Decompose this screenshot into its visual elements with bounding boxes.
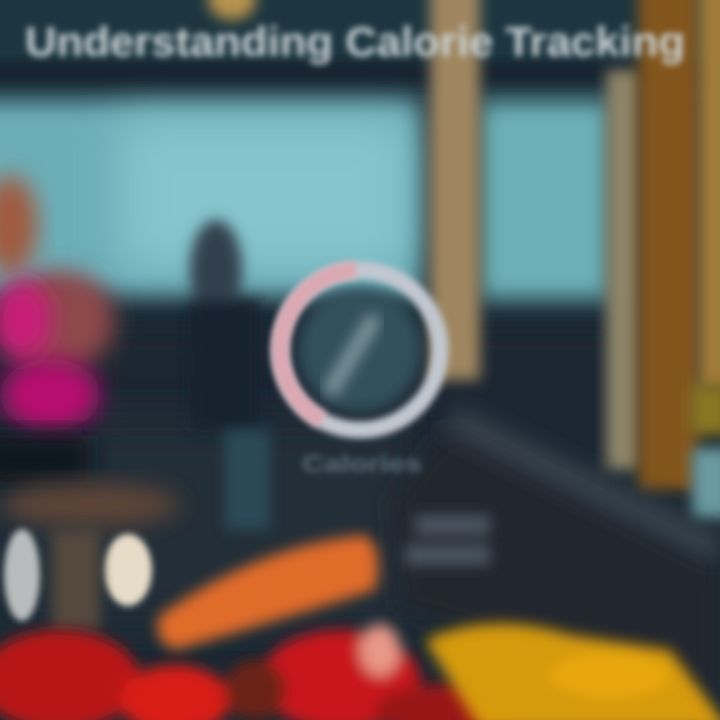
vegetables: yellow pepper [425,624,720,720]
left figure in pink [0,175,180,527]
icon: top badge [208,0,256,20]
person silhouette [190,220,270,530]
white plates [4,529,152,630]
caption under chart: Calories [302,451,422,478]
wooden columns [430,0,720,518]
dark counter [390,418,720,700]
title: Understanding Calorie Tracking [25,18,685,65]
donut chart [280,270,440,430]
vegetables: red tomatoes [0,624,515,720]
vegetables: carrot [157,535,378,650]
secondary text block [405,515,490,565]
